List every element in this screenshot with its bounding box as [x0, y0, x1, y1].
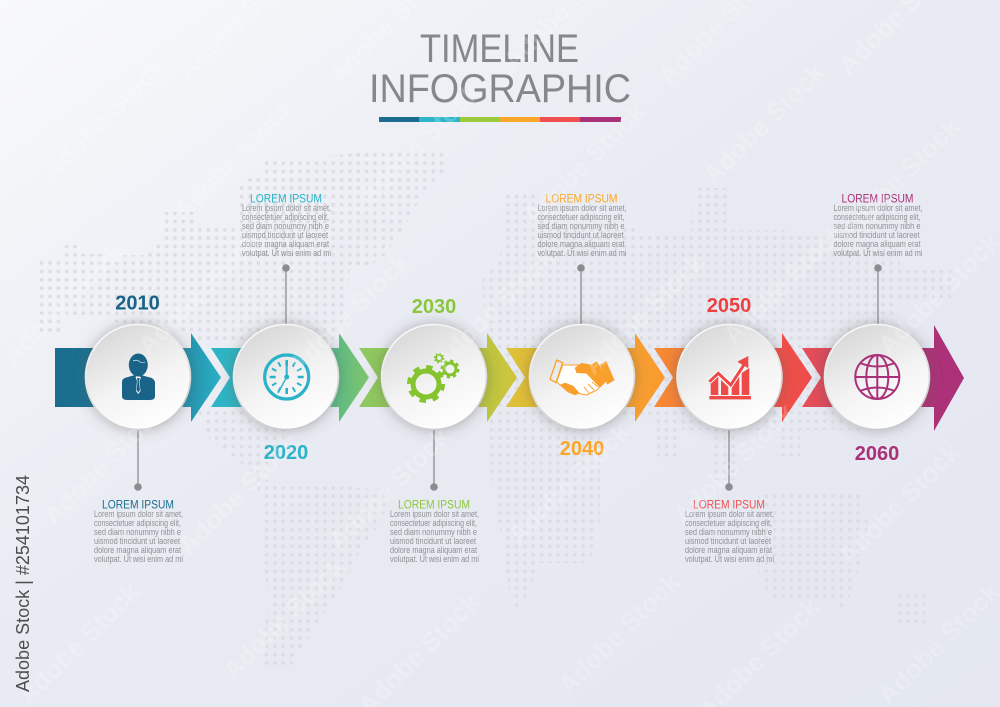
- text block 2020: Lorem ipsum dolor sit amet,: [242, 203, 331, 213]
- watermarks: Adobe Stock: [217, 551, 351, 685]
- icon: businessman: [122, 354, 155, 400]
- watermarks: Adobe Stock: [132, 226, 266, 360]
- text block 2030: volutpat. Ut wisi enim ad mi: [390, 554, 479, 564]
- text block 2010: Lorem ipsum dolor sit amet,: [94, 509, 183, 519]
- icon: clock: [265, 355, 309, 399]
- title: [369, 27, 631, 111]
- text block 2030: LOREM IPSUM: [398, 498, 470, 512]
- text block 2050: [685, 498, 774, 564]
- text block 2060: uismod tincidunt ut laoreet: [834, 230, 920, 240]
- text block 2010: LOREM IPSUM: [102, 498, 174, 512]
- icon: globe: [855, 355, 899, 399]
- text block 2040: [538, 192, 627, 258]
- watermarks: Adobe Stock: [667, 396, 801, 530]
- text block 2040: uismod tincidunt ut laoreet: [538, 230, 624, 240]
- text block 2040: LOREM IPSUM: [546, 192, 618, 206]
- watermarks: Adobe Stock: [322, 421, 456, 555]
- watermarks: Adobe Stock: [282, 246, 416, 380]
- text block 2040: dolore magna aliquam erat: [538, 239, 625, 249]
- watermarks: Adobe Stock: [12, 576, 146, 707]
- stock id side label: Adobe Stock | #254101734: [13, 475, 33, 692]
- text block 2060: Lorem ipsum dolor sit amet,: [834, 203, 922, 213]
- text block 2010: sed diam nonummy nibh e: [94, 527, 181, 537]
- arrow 5: [654, 333, 812, 422]
- years: [115, 292, 899, 465]
- text block 2020: LOREM IPSUM: [250, 192, 322, 206]
- year 2050: 2050: [707, 295, 751, 317]
- connector lines: [134, 264, 882, 491]
- text block 2030: uismod tincidunt ut laoreet: [390, 536, 476, 546]
- circle discs: [86, 324, 930, 430]
- text block 2050: consectetuer adipiscing elit,: [685, 518, 772, 528]
- text block 2010: consectetuer adipiscing elit,: [94, 518, 181, 528]
- text block 2050: volutpat. Ut wisi enim ad mi: [685, 554, 774, 564]
- dotted world map: [38, 148, 952, 668]
- text block 2060: LOREM IPSUM: [842, 192, 914, 206]
- year 2010: 2010: [115, 292, 160, 314]
- title colour bar: [379, 117, 621, 122]
- text block 2010: uismod tincidunt ut laoreet: [94, 536, 180, 546]
- watermarks: Adobe Stock: [717, 216, 851, 350]
- text block 2060: sed diam nonummy nibh e: [834, 221, 921, 231]
- watermarks: Adobe Stock: [517, 96, 651, 230]
- text block 2050: dolore magna aliquam erat: [685, 545, 772, 555]
- watermarks: Adobe Stock: [502, 416, 636, 550]
- text block 2030: consectetuer adipiscing elit,: [390, 518, 477, 528]
- watermarks: Adobe Stock: [552, 566, 686, 700]
- icon: gears: [409, 354, 458, 401]
- text block 2060: consectetuer adipiscing elit,: [834, 212, 920, 222]
- arrow 6: [802, 325, 964, 431]
- watermarks: Adobe Stock: [0, 236, 131, 370]
- watermarks: Adobe Stock: [577, 246, 711, 380]
- arrow 3: [359, 333, 517, 422]
- text block 2030: dolore magna aliquam erat: [390, 545, 477, 555]
- watermarks: Adobe Stock: [697, 56, 831, 190]
- text block 2030: Lorem ipsum dolor sit amet,: [390, 509, 479, 519]
- text block 2040: sed diam nonummy nibh e: [538, 221, 625, 231]
- watermarks: Adobe Stock: [832, 436, 966, 570]
- title line: timeline: TIMELINE: [420, 27, 579, 71]
- watermarks: Adobe Stock: [37, 51, 171, 185]
- year 2040: 2040: [560, 438, 604, 460]
- watermarks: Adobe Stock: [167, 91, 301, 225]
- text block 2010: volutpat. Ut wisi enim ad mi: [94, 554, 183, 564]
- text block 2040: volutpat. Ut wisi enim ad mi: [538, 248, 627, 258]
- text block 2020: dolore magna aliquam erat: [242, 239, 329, 249]
- icon: growth chart: [709, 356, 751, 399]
- watermarks: Adobe Stock: [352, 76, 486, 210]
- title line: infographic: INFOGRAPHIC: [369, 67, 631, 111]
- arrow 1: [55, 333, 221, 422]
- text block 2040: consectetuer adipiscing elit,: [538, 212, 624, 222]
- year 2060: 2060: [855, 443, 899, 465]
- text block 2040: Lorem ipsum dolor sit amet,: [538, 203, 626, 213]
- text block 2030: [390, 498, 479, 564]
- text block 2050: Lorem ipsum dolor sit amet,: [685, 509, 774, 519]
- text block 2030: sed diam nonummy nibh e: [390, 527, 477, 537]
- text block 2020: uismod tincidunt ut laoreet: [242, 230, 328, 240]
- text block 2010: [94, 498, 183, 564]
- text block 2060: dolore magna aliquam erat: [834, 239, 921, 249]
- arrow band: [55, 325, 964, 431]
- text block 2050: uismod tincidunt ut laoreet: [685, 536, 771, 546]
- text block 2020: volutpat. Ut wisi enim ad mi: [242, 248, 331, 258]
- watermarks: Adobe Stock: [172, 426, 306, 560]
- text block 2020: sed diam nonummy nibh e: [242, 221, 329, 231]
- arrow 4: [506, 333, 665, 422]
- year 2030: 2030: [412, 296, 456, 318]
- text block 2060: volutpat. Ut wisi enim ad mi: [834, 248, 923, 258]
- text block 2020: consectetuer adipiscing elit,: [242, 212, 329, 222]
- watermarks: Adobe Stock: [427, 241, 561, 375]
- text block 2050: sed diam nonummy nibh e: [685, 527, 772, 537]
- watermarks: Adobe Stock: [832, 111, 966, 245]
- year 2020: 2020: [264, 442, 308, 464]
- arrow 2: [211, 333, 369, 422]
- text block 2020: [242, 192, 331, 258]
- text block 2010: dolore magna aliquam erat: [94, 545, 181, 555]
- icon: handshake: [550, 360, 614, 395]
- text block 2060: [834, 192, 923, 258]
- text block 2050: LOREM IPSUM: [693, 498, 765, 512]
- watermarks: Adobe Stock: [37, 396, 171, 530]
